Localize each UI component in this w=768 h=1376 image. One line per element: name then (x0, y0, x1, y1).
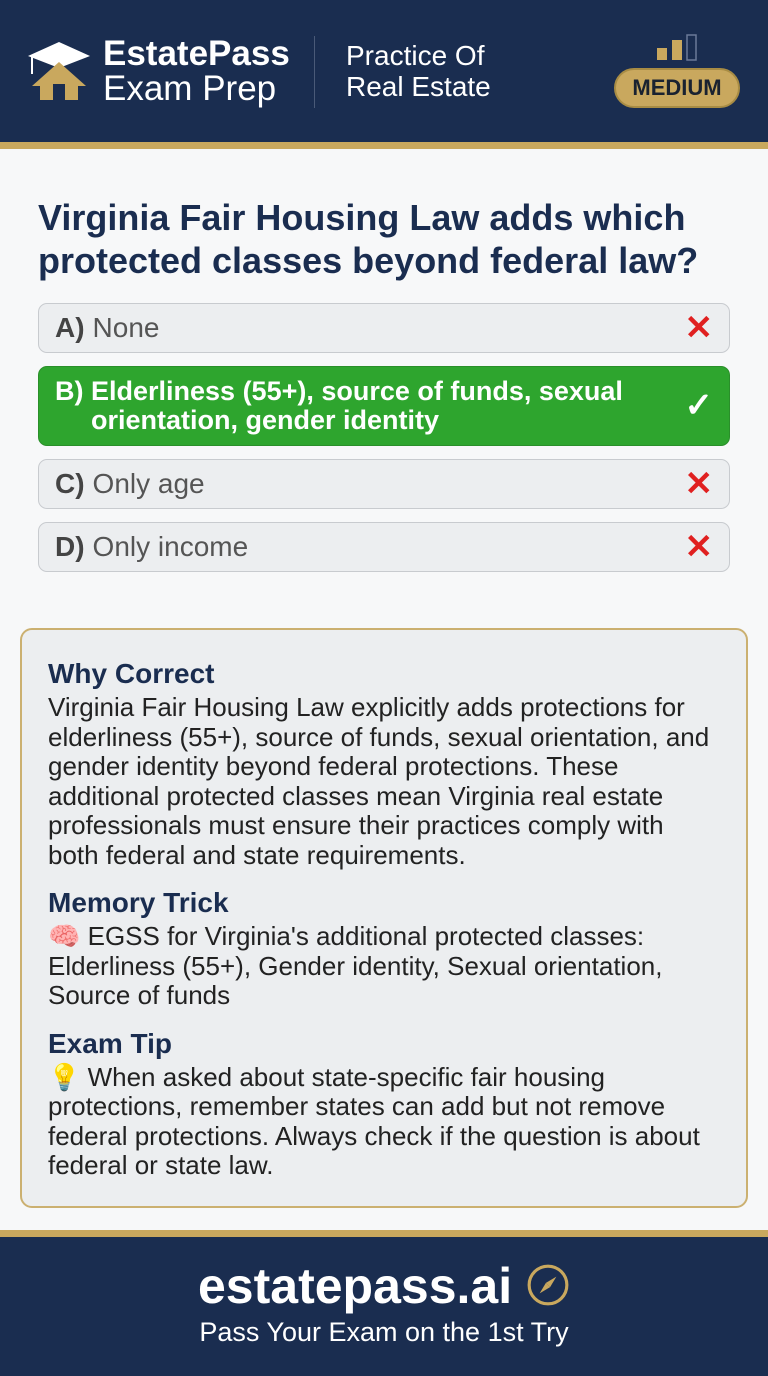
option B correct: ✓ (684, 386, 713, 424)
option D: Only income (93, 531, 248, 562)
explanation panel: 💡 When asked about state-specific fair housing protections, remember states can add but not remove federal protections. Always check if the question is about federal or state law. (48, 1062, 700, 1180)
question: Virginia Fair Housing Law adds which protected classes beyond federal law? (38, 197, 698, 281)
tagline: Pass Your Exam on the 1st Try (199, 1317, 569, 1347)
logo text: EstatePass (103, 34, 290, 73)
option D: D) (55, 531, 85, 562)
option B correct (38, 366, 730, 446)
option A: None (93, 312, 159, 343)
option A: A) (55, 312, 85, 343)
explanation panel: Virginia Fair Housing Law explicitly adds protections for elderliness (55+), source of funds, sexual orientation, and gender identity beyond federal protections. These additional protected classes mean Virginia real estate professionals must ensure their practices comply with both federal and state requirements. (48, 692, 709, 870)
icon: difficulty bars (657, 34, 697, 61)
badge: medium: MEDIUM (632, 75, 722, 100)
option A (38, 303, 730, 353)
header (0, 0, 768, 142)
option B correct: B) Elderliness (55+), source of funds, sexual orientation, gender identity (55, 376, 623, 435)
option C: ✕ (684, 465, 713, 503)
footer (0, 1237, 768, 1376)
option C (38, 459, 730, 509)
explanation panel: 🧠 EGSS for Virginia's additional protected classes: Elderliness (55+), Gender identity, Sexual orientation, Source of funds (48, 921, 662, 1010)
option C: C) (55, 468, 85, 499)
logo text: Exam Prep (103, 69, 276, 108)
category: Practice Of (346, 40, 484, 71)
badge: medium (614, 68, 740, 108)
explanation panel (20, 628, 748, 1208)
option C: Only age (93, 468, 205, 499)
option D (38, 522, 730, 572)
logo text (103, 34, 290, 108)
option D: ✕ (684, 528, 713, 566)
explanation panel: Memory Trick (48, 887, 229, 918)
category (346, 40, 491, 102)
category: Real Estate (346, 71, 491, 102)
explanation panel: Exam Tip (48, 1028, 172, 1058)
option A: ✕ (684, 309, 713, 347)
explanation panel: Why Correct (48, 658, 214, 689)
footer brand: estatepass.ai (198, 1258, 512, 1314)
icon: house logo (28, 42, 90, 100)
